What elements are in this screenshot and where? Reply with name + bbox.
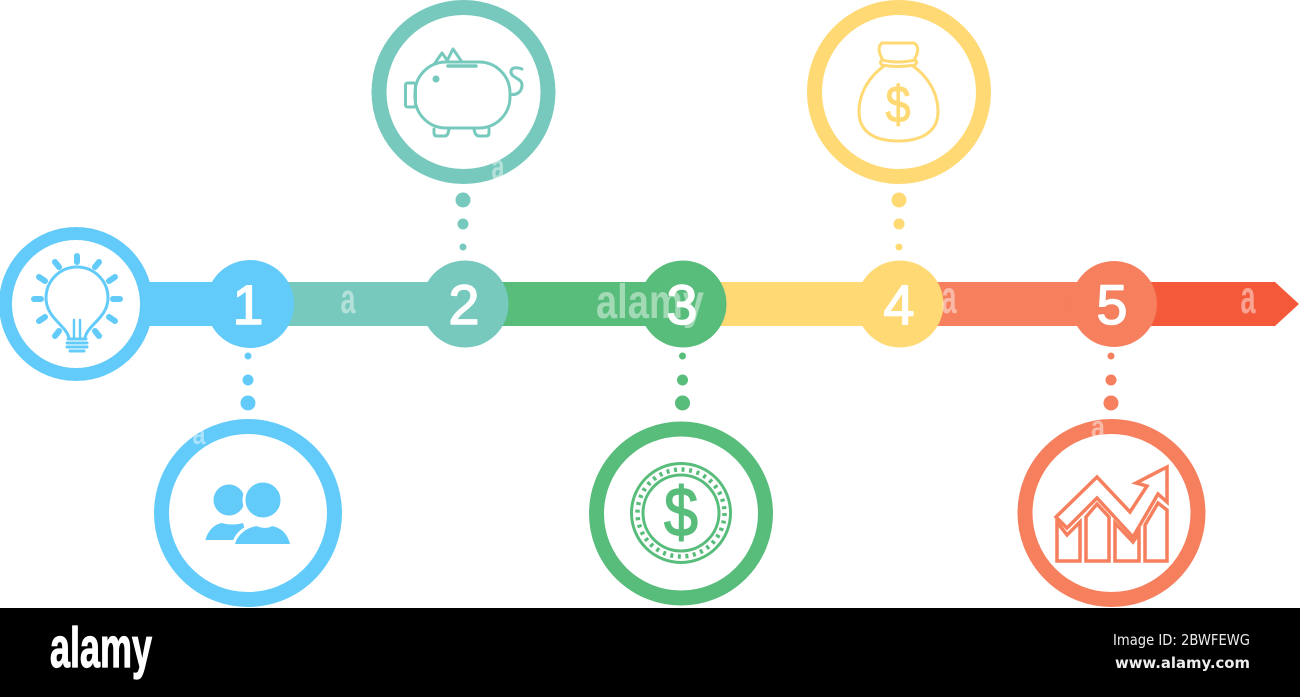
icon: money bag [859,43,938,141]
dotted connector: step 5 [1104,352,1118,410]
step 1 marker: 1 [232,273,264,336]
step 2 marker: 2 [448,273,480,336]
panel: step 2 piggy bank [379,8,548,176]
dotted connector: step 3 [675,352,690,410]
step 5 marker: 5 [1096,273,1128,336]
watermark: scattered letters: a [942,271,957,323]
step 2 marker [422,260,508,348]
dotted connector: step 1 [240,352,256,410]
watermark: scattered letters [192,146,1256,451]
panel: step 4 money bag [814,8,984,176]
panel: step 1 people [162,426,334,600]
step 4 marker: 4 [883,273,915,336]
watermark: centre logo: alamy [596,276,704,329]
watermark: scattered letters: a [340,275,356,322]
watermark: scattered letters: a [492,146,505,187]
timeline arrow bar [145,282,1299,326]
step 3 marker: 3 [666,273,698,336]
footer logo: alamy [50,616,152,680]
step 5 marker [1071,261,1157,347]
icon: lightbulb [34,256,120,351]
watermark: scattered letters: a [1091,409,1105,445]
icon: growth chart with arrow [1056,467,1167,561]
icon: money bag: $ [886,76,911,134]
footer band [0,608,1300,697]
icon: two people [206,481,292,546]
step 1 marker [206,260,294,348]
step 3 marker [640,260,726,348]
start circle: lightbulb [6,234,146,374]
dotted connector: step 4 [892,192,906,250]
image id: Image ID: 2BWFEWG [1113,631,1250,649]
panel: step 5 growth chart [1025,426,1198,600]
icon: dollar coin [632,464,730,562]
website: www.alamy.com [1115,654,1250,672]
watermark: scattered letters: a [192,418,206,451]
dotted connector: step 2 [456,192,470,250]
icon: dollar coin: $ [664,473,698,551]
panel: step 3 coin [596,429,766,598]
icon: piggy bank [406,49,522,136]
watermark: scattered letters: a [1240,271,1256,323]
step 4 marker [856,260,944,348]
